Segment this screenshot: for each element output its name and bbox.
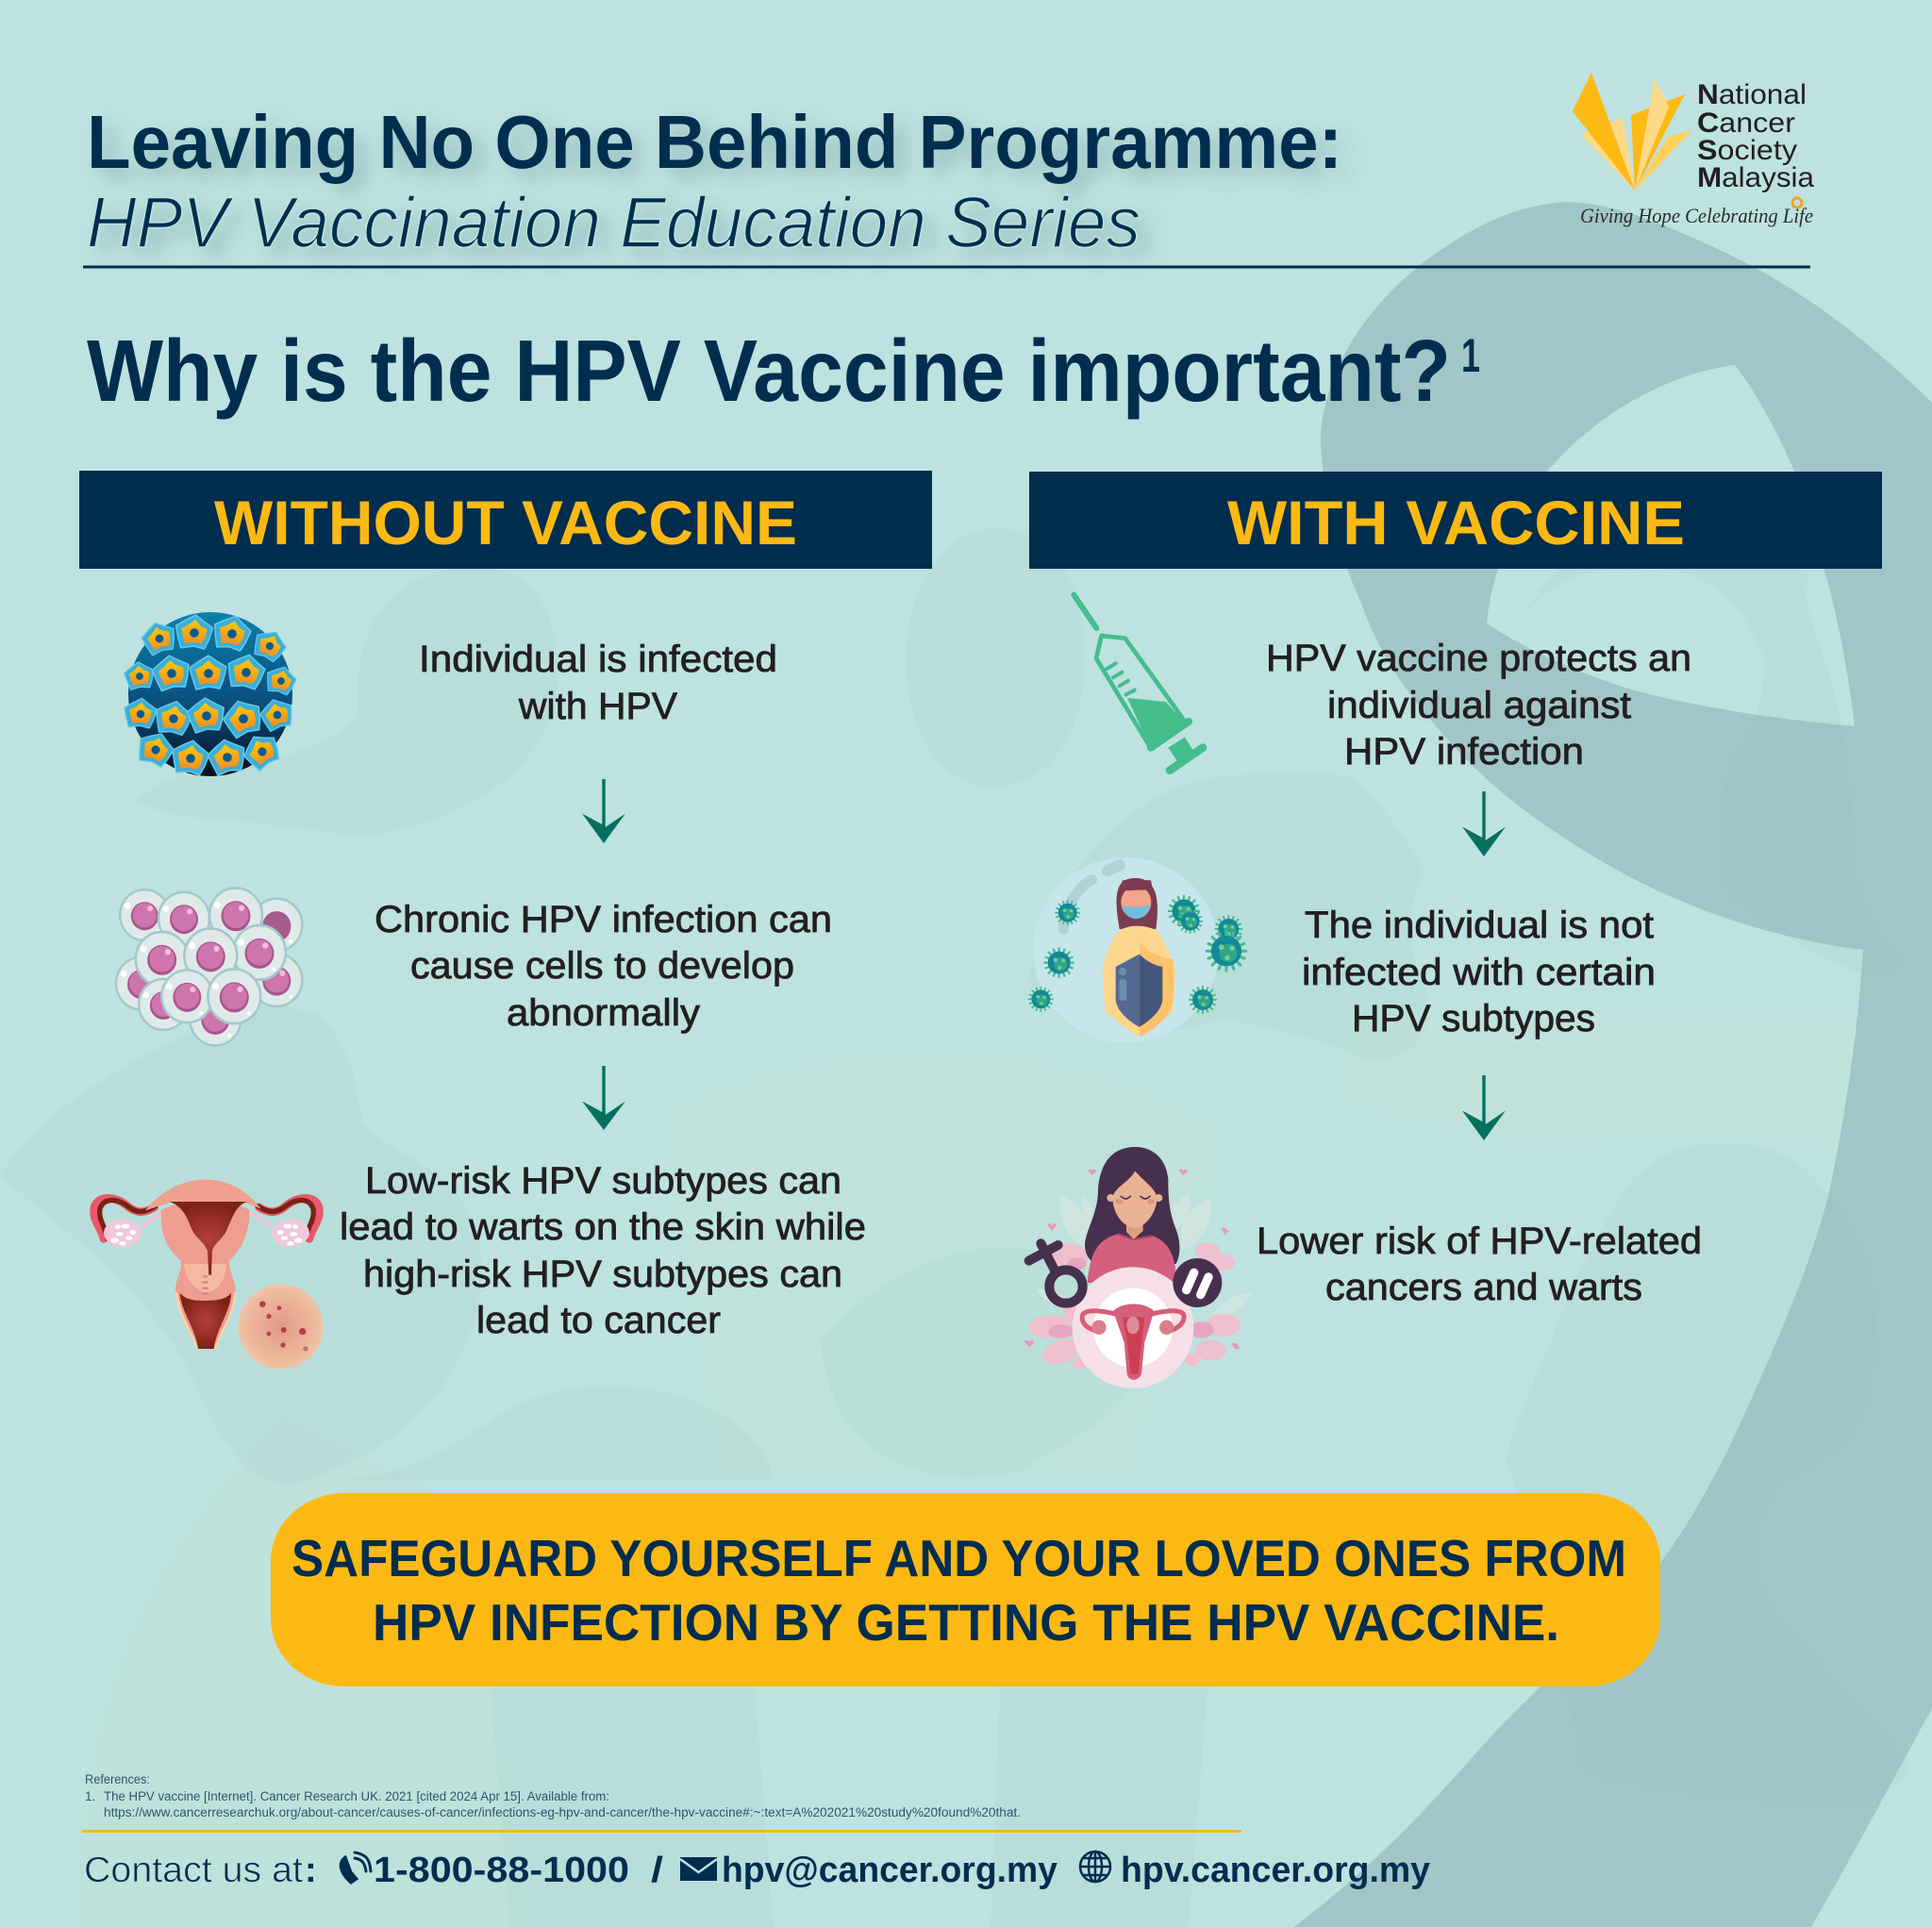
icon: phone bbox=[341, 1852, 371, 1883]
ribbon silhouette bbox=[1294, 202, 1932, 1927]
text: step 1 right: HPV vaccine protects an bbox=[1266, 638, 1691, 679]
text: step 1 right: individual against bbox=[1327, 685, 1631, 726]
flowers bbox=[1029, 1242, 1241, 1370]
arrow bbox=[582, 779, 625, 843]
icon: syringe bbox=[1074, 595, 1203, 771]
logo: National Cancer Society Malaysia bbox=[1573, 73, 1814, 227]
contact bar: 1-800-88-1000 bbox=[374, 1851, 629, 1890]
contact bar: Contact us at bbox=[84, 1851, 303, 1890]
contact bar: : bbox=[305, 1851, 317, 1890]
arrow bbox=[582, 1066, 625, 1130]
references bbox=[85, 1772, 1021, 1819]
logo: National Cancer Society Malaysia: National bbox=[1697, 79, 1807, 110]
text: step 3 right bbox=[1257, 1221, 1702, 1308]
logo: National Cancer Society Malaysia: Malaysia bbox=[1697, 162, 1814, 193]
panel: with vaccine header: WITH VACCINE bbox=[1227, 488, 1685, 557]
text: step 3 left: lead to cancer bbox=[476, 1300, 721, 1341]
text: step 1 right: HPV infection bbox=[1344, 731, 1584, 772]
logo: National Cancer Society Malaysia: Giving Hope Celebrating Life bbox=[1580, 204, 1813, 227]
panel: with vaccine header bbox=[1029, 472, 1882, 569]
contact bar: hpv@cancer.org.my bbox=[722, 1851, 1058, 1890]
arrow bbox=[1462, 1075, 1506, 1140]
text: step 2 right: HPV subtypes bbox=[1352, 998, 1595, 1039]
callout: SAFEGUARD YOURSELF AND YOUR LOVED ONES FROM bbox=[291, 1529, 1626, 1587]
text: step 1 right bbox=[1266, 638, 1691, 772]
text: step 3 left: high-risk HPV subtypes can bbox=[363, 1254, 842, 1295]
heading: why: 1 bbox=[1461, 329, 1480, 382]
references: 1. bbox=[85, 1789, 95, 1803]
references: References: bbox=[85, 1772, 150, 1786]
text: step 2 left: cause cells to develop bbox=[410, 945, 794, 987]
text: step 3 right: cancers and warts bbox=[1325, 1267, 1642, 1308]
leaves bbox=[1036, 1193, 1253, 1321]
icon: globe bbox=[1080, 1852, 1110, 1882]
text: step 3 left: lead to warts on the skin while bbox=[340, 1206, 866, 1248]
contact bar: hpv.cancer.org.my bbox=[1121, 1851, 1430, 1890]
text: step 3 right: Lower risk of HPV-related bbox=[1257, 1221, 1702, 1262]
icon: uterus with warts bbox=[94, 1180, 324, 1370]
panel: without vaccine header: WITHOUT VACCINE bbox=[214, 488, 797, 557]
text: step 2 left: Chronic HPV infection can bbox=[375, 899, 832, 940]
icon: abnormal cells bbox=[116, 888, 302, 1045]
icon: woman with uterus and symbols bbox=[1024, 1147, 1253, 1388]
references: https://www.cancerresearchuk.org/about-cancer/causes-of-cancer/infections-eg-hpv-and-cancer/the-hpv-vaccine#:~:text=A%202021%20study%20found%20that. bbox=[104, 1805, 1021, 1819]
contact bar: / bbox=[651, 1851, 664, 1890]
text: step 1 left: with HPV bbox=[518, 686, 677, 727]
text: step 2 right bbox=[1302, 905, 1656, 1039]
title line one: Leaving No One Behind Programme: bbox=[87, 100, 1342, 184]
text: step 2 right: The individual is not bbox=[1305, 905, 1654, 946]
text: step 3 left bbox=[340, 1160, 866, 1341]
left tube and ovary bbox=[94, 1198, 162, 1247]
logo: National Cancer Society Malaysia: Society bbox=[1697, 135, 1797, 166]
icon: mail bbox=[680, 1857, 717, 1881]
hearts bbox=[1024, 1169, 1240, 1350]
text: step 2 left: abnormally bbox=[507, 992, 700, 1034]
callout bbox=[271, 1493, 1660, 1686]
text: step 2 left bbox=[375, 899, 832, 1034]
text: step 1 left: Individual is infected bbox=[419, 639, 777, 680]
arrow bbox=[1462, 791, 1506, 856]
contact bar bbox=[84, 1851, 1430, 1890]
icon: protected woman in bubble bbox=[1029, 857, 1246, 1043]
logo: National Cancer Society Malaysia: Cancer bbox=[1697, 108, 1795, 139]
title line two: HPV Vaccination Education Series bbox=[87, 183, 1141, 263]
title block bbox=[87, 100, 1342, 263]
text: step 3 left: Low-risk HPV subtypes can bbox=[365, 1160, 841, 1202]
heading: why: Why is the HPV Vaccine important? bbox=[87, 322, 1451, 420]
panel: without vaccine header bbox=[79, 471, 932, 569]
references: The HPV vaccine [Internet]. Cancer Research UK. 2021 [cited 2024 Apr 15]. Available from: bbox=[104, 1789, 609, 1803]
text: step 1 left bbox=[419, 639, 777, 727]
right tube and ovary bbox=[251, 1198, 319, 1247]
viruses bbox=[1029, 896, 1246, 1013]
icon: HPV virus sphere bbox=[123, 612, 299, 776]
text: step 2 right: infected with certain bbox=[1302, 952, 1656, 993]
callout: HPV INFECTION BY GETTING THE HPV VACCINE. bbox=[373, 1593, 1559, 1652]
